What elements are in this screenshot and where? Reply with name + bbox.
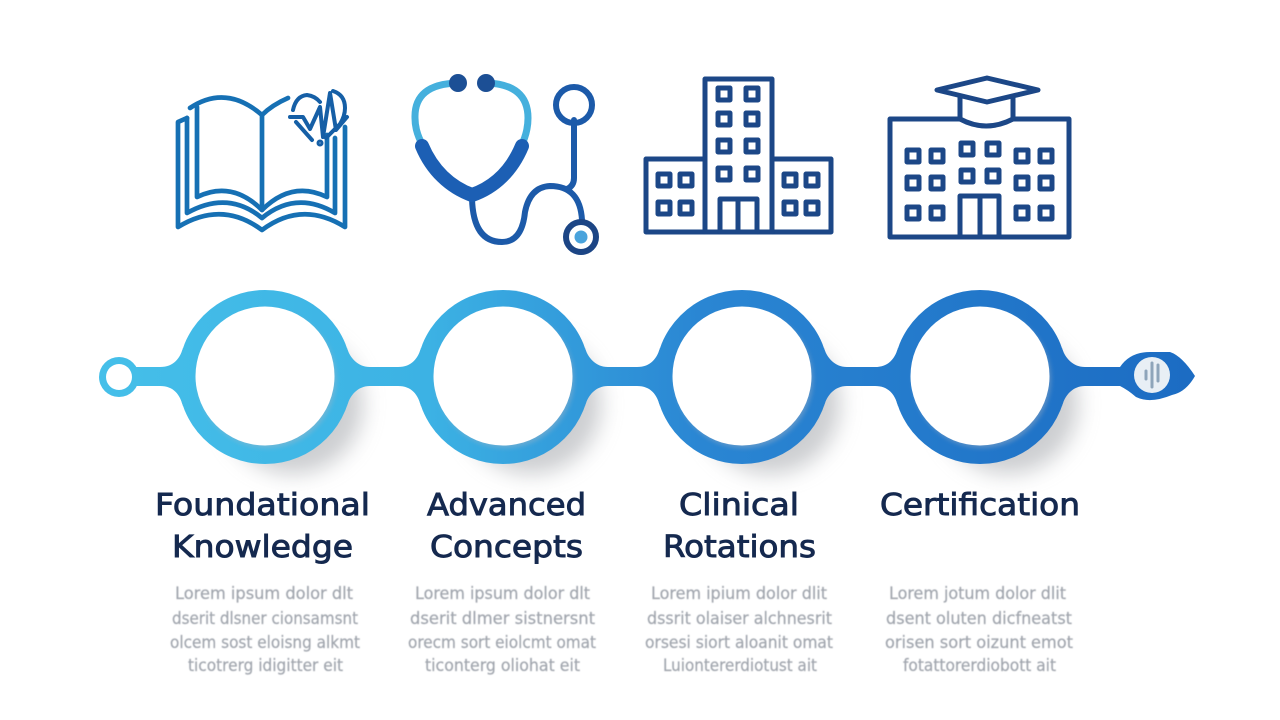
body text 2: dserit dlmer sistnersnt (410, 609, 596, 628)
icon: heartbeat heart (290, 91, 347, 144)
body text 1: Lorem ipsum dolor dlt (175, 584, 354, 603)
heading: Certification: Certification (880, 488, 1080, 523)
step circle 1 (196, 306, 334, 446)
heading: Advanced Concepts: Advanced (427, 488, 586, 523)
step circle 2 (434, 306, 572, 446)
icon: stethoscope (415, 74, 596, 252)
body text 3: dssrit olaiser alchnesrit (647, 609, 833, 628)
end node badge (1134, 357, 1170, 393)
icon: open book with heartbeat (178, 91, 347, 230)
step 2 text (408, 488, 596, 675)
body text 4 (885, 584, 1074, 675)
start node hole (106, 364, 132, 390)
step 4 text (880, 488, 1080, 675)
heading: Clinical Rotations (663, 488, 816, 565)
body text 4: Lorem jotum dolor dlit (889, 584, 1067, 603)
body text 2 (408, 584, 596, 675)
body text 4: dsent oluten dicfneatst (886, 609, 1073, 628)
body text 1 (170, 584, 360, 675)
body text 3: Luiontererdiotust ait (663, 656, 817, 675)
body text 1: olcem sost eloisng alkmt (170, 633, 360, 652)
body text 4: fotattorerdiobott ait (903, 656, 1056, 675)
body text 1: ticotrerg idigitter eit (188, 656, 343, 675)
heading: Clinical Rotations: Rotations (663, 530, 816, 565)
step circle 3 (672, 306, 812, 446)
circle drop shadows (223, 334, 1078, 474)
heading: Foundational Knowledge: Knowledge (172, 530, 353, 565)
timeline track (99, 290, 1195, 474)
heading: Foundational Knowledge: Foundational (155, 488, 370, 523)
body text 3 (645, 584, 833, 675)
heading: Clinical Rotations: Clinical (679, 488, 799, 523)
body text 2: Lorem ipsum dolor dlt (415, 584, 591, 603)
body text 3: orsesi siort aloanit omat (645, 633, 833, 652)
body text 3: Lorem ipium dolor dlit (651, 584, 828, 603)
body text 2: ticonterg oliohat eit (425, 656, 581, 675)
body text 1: dserit dlsner cionsamsnt (172, 609, 358, 628)
icon: hospital building (646, 79, 831, 232)
step 3 text (645, 488, 833, 675)
heading: Advanced Concepts (427, 488, 586, 565)
inner shading (198, 310, 1051, 448)
step 1 text (155, 488, 370, 675)
connector line and nodes (99, 290, 1195, 464)
heading: Advanced Concepts: Concepts (430, 530, 583, 565)
body text 2: orecm sort eiolcmt omat (408, 633, 596, 652)
icon: graduation school building (890, 78, 1069, 237)
body text 4: orisen sort oizunt emot (885, 633, 1074, 652)
step circle 4 (910, 306, 1050, 446)
heading: Foundational Knowledge (155, 488, 370, 565)
